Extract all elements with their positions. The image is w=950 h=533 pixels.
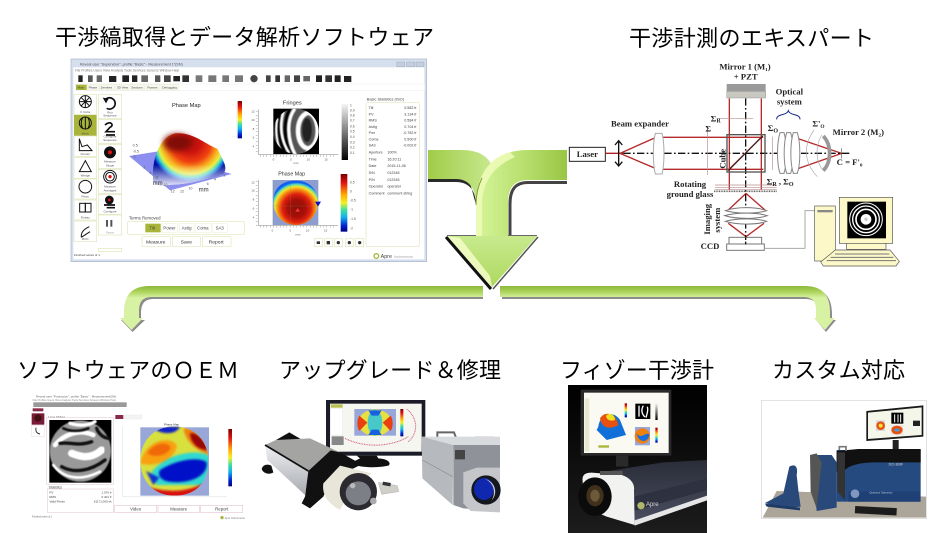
chart: fringes: 10: [251, 118, 255, 122]
chart: phase map top view: -1: [350, 208, 353, 212]
chart: fringes: 4: [253, 144, 255, 148]
brace: [777, 111, 800, 119]
photo: OEM software screenshot: Statistics: [49, 485, 62, 489]
photo: upgrade hardware: [262, 400, 501, 512]
chart: 3D phase map: 12: [171, 190, 175, 194]
chart: 3D phase map: -1: [133, 154, 136, 158]
panel: basic statistics: 012345: [387, 178, 400, 182]
screenshot: analysis software window: Finished series of 1: [74, 253, 100, 257]
side panel: second tool column: Sequence: [103, 138, 117, 142]
panel: basic statistics: Tilt: [369, 106, 373, 110]
chart: 3D phase map: 10: [188, 186, 192, 190]
panel: basic statistics: 2015-11-06: [387, 164, 406, 168]
diagram labels: Σ': [812, 119, 820, 129]
photo: OEM software screenshot: Measure: [170, 507, 188, 512]
panel: basic statistics: -0.002 fr: [403, 144, 417, 148]
chart: fringes: 0.7: [350, 119, 355, 123]
photo: OEM software screenshot: Phase Map: [164, 422, 179, 426]
panel: basic statistics: RMS: [369, 119, 377, 123]
chart: 3D phase map: 6: [207, 182, 209, 186]
beam paths: [620, 98, 842, 237]
photo: Fizeau interferometer: [568, 385, 707, 533]
laser box: [569, 147, 605, 161]
diagram labels: Rotating: [674, 179, 707, 189]
heading: software OEM: ソフトウェアのＯＥＭ: [17, 358, 239, 383]
photo: OEM software screenshot: RMS: [49, 495, 56, 499]
chart: phase map top view: 0: [272, 229, 274, 233]
panel: basic statistics: Pwr: [369, 131, 376, 135]
chart: fringes: mm: [293, 161, 299, 165]
title: interferometry expert: 干渉計測のエキスパート: [629, 26, 874, 51]
side panel: second tool column: Single: [106, 163, 114, 167]
diagram labels: CCD: [701, 241, 719, 251]
panel: basic statistics: Basic Statistics (ISO): [367, 96, 405, 101]
diagram labels: system: [777, 97, 803, 107]
chart: fringes: 0.1: [350, 151, 355, 155]
side panel: left tool column: Fizeau: [81, 216, 90, 220]
main instrument: Quantum Optronics: [869, 490, 893, 494]
title: fringe acquisition and analysis software: 干渉縞取得とデータ解析ソフトウェア: [55, 25, 434, 50]
chart: 3D phase map: mm: [153, 181, 163, 187]
chart: fringes: 5: [290, 158, 292, 162]
chart: phase map top view: 10: [251, 188, 255, 192]
monitor: [326, 400, 425, 467]
chart: phase map top view: -1.5: [350, 217, 356, 221]
controls: terms removed and action buttons: Terms Removed: [129, 215, 161, 220]
side panel: second tool column: Averaged: [104, 188, 117, 192]
side panel: second tool column: Measure: [104, 160, 116, 164]
chart: fringes: 15: [324, 158, 328, 162]
controls: terms removed and action buttons: Measure: [146, 240, 166, 246]
panel: basic statistics: [366, 96, 419, 247]
chart: fringes: Fringes: [283, 101, 302, 107]
photo: OEM software screenshot: File Profiles Users View Analysis Tools Services Screens Window Help: [33, 398, 116, 402]
side panel: second tool column: [98, 94, 122, 251]
photo: OEM software screenshot: 1.076 fr: [102, 490, 112, 494]
chart: phase map top view: 12: [251, 180, 255, 184]
logo: Apre Instruments: [374, 254, 413, 260]
logo: Apre Instruments: Instruments: [394, 255, 413, 259]
photo: OEM software screenshot: Apre Instruments: [225, 516, 246, 520]
diagram labels: Σ: [768, 123, 773, 133]
diagram labels: ground glass: [667, 189, 714, 199]
side panel: second tool column: Pause: [106, 231, 115, 235]
panel: basic statistics: 0.704 fr: [404, 125, 417, 129]
chart: fringes: 0.4: [350, 135, 355, 139]
panel: basic statistics: 16:20:11: [387, 157, 401, 161]
panel: basic statistics: Operator: [369, 185, 384, 189]
diagram labels: Optical: [776, 87, 804, 97]
panel: basic statistics: P/N: [369, 178, 375, 182]
blue fixtures: [765, 453, 897, 515]
photo: OEM software screenshot: Valid Points: [49, 499, 65, 503]
chart: fringes: 0.5: [350, 130, 355, 134]
optical table: [763, 491, 926, 518]
diagram labels: , Σ: [777, 177, 789, 187]
main instrument: DCI-300F: [889, 463, 903, 467]
screenshot: analysis software window: [71, 59, 427, 262]
panel: basic statistics: Date: [369, 164, 376, 168]
chart: fringes: 6: [253, 136, 255, 140]
diagram labels: R: [772, 182, 777, 188]
toolbar icons: [78, 75, 351, 82]
diagram labels: Cube: [718, 149, 728, 169]
photo: custom system: [761, 400, 927, 519]
panel: basic statistics: 100%: [387, 150, 397, 154]
side panel: second tool column: Sequence: [103, 114, 117, 118]
panel: basic statistics: AstIg: [369, 125, 377, 129]
diagram labels: Mirror 1 (M₁): [719, 61, 771, 71]
controls: terms removed and action buttons: Coma: [197, 226, 209, 231]
centre lines: [623, 98, 850, 245]
CCD: [727, 237, 764, 250]
chart: fringes: 1: [350, 104, 352, 108]
diagram labels: Σ: [767, 177, 772, 187]
chart: phase map top view: 5: [289, 229, 291, 233]
panel: basic statistics: S/N: [369, 171, 375, 175]
side panel: left tool column: Wedge: [81, 174, 90, 178]
side panel: second tool column: Configure: [104, 135, 117, 139]
tab bar: Debugging: [162, 86, 177, 90]
chart: 3D phase map: 2: [223, 174, 225, 178]
panel: basic statistics: 0.584 fr: [404, 119, 417, 123]
beam splitter cube: [727, 135, 765, 172]
chart: phase map top view: 0: [350, 189, 352, 193]
photo: OEM software screenshot: 51171.000 ok: [94, 499, 112, 503]
chart: phase map top view: 4: [253, 216, 255, 220]
chart: phase map top view: Phase Map: [278, 172, 305, 178]
heading: custom support: カスタム対応: [772, 358, 905, 383]
arrow: merging main green arrow: [428, 150, 567, 289]
diagram labels: O: [789, 182, 794, 188]
instrument: [578, 460, 707, 526]
chart: fringes: 12: [251, 109, 255, 113]
panel: basic statistics: comment string: [387, 192, 412, 196]
chart: phase map top view: 8: [253, 198, 255, 202]
chart: fringes: 0.8: [350, 114, 355, 118]
diagram labels: Mirror 2 (M₂): [833, 127, 884, 137]
chart: 3D phase map: Phase Map: [172, 103, 201, 109]
tab bar: Zernikes: [101, 86, 113, 90]
chart: fringes: 8: [253, 127, 255, 131]
chart: 3D phase map: 0.5: [133, 144, 138, 148]
chart: fringes: 0.2: [350, 146, 355, 150]
controls: terms removed and action buttons: Report: [209, 240, 224, 246]
rotating ground glass: [714, 189, 777, 194]
photo: OEM software screenshot: 0.401 fr: [102, 495, 112, 499]
arrow: branch to the right: [500, 286, 836, 332]
controls: terms removed and action buttons: Power: [163, 226, 176, 231]
chart: phase map top view: 15: [324, 229, 328, 233]
controls: terms removed and action buttons: [128, 215, 364, 247]
second camera: [422, 432, 501, 512]
chart: fringes: 0: [273, 158, 275, 162]
chart: 3D phase map: mm: [199, 187, 209, 193]
monitor: [866, 405, 923, 450]
diagram labels: C = F'₀: [837, 157, 863, 167]
chart: 3D phase map: 12: [180, 190, 184, 194]
tab bar: 3D View: [117, 86, 129, 90]
side panel: second tool column: Measure: [104, 185, 116, 189]
chart: phase map top view: mm: [295, 232, 301, 236]
reference lines: [707, 118, 777, 189]
heading: Fizeau interferometer: フィゾー干渉計: [560, 358, 714, 383]
photo: OEM software screenshot: Reveal user "Production", profile "Basic" - Measurement(SN): [36, 394, 116, 398]
main instrument: [837, 447, 921, 502]
panel: basic statistics: Time: [369, 157, 377, 161]
chart: phase map top view: 10: [306, 229, 310, 233]
photo: OEM software screenshot: Video: [130, 507, 142, 512]
arrow: branch to the left: [120, 286, 483, 332]
controls: terms removed and action buttons: SA3: [216, 226, 224, 231]
beam expander lens: [653, 133, 664, 174]
heading: upgrade and repair: アップグレード＆修理: [279, 358, 501, 383]
panel: basic statistics: 012345: [387, 171, 400, 175]
panel: basic statistics: 3.134 fr: [404, 112, 417, 116]
chart: fringes: 0.3: [350, 140, 355, 144]
mirror 1: [727, 84, 766, 98]
panel: basic statistics: Comment: [369, 192, 385, 196]
diagram labels: O: [773, 128, 778, 134]
tab bar: Frames: [147, 86, 158, 90]
monitor: [581, 390, 671, 467]
tab bar: Main: [78, 86, 84, 90]
diagram labels: O: [820, 124, 825, 130]
mirror 2 and wavefronts: [806, 130, 842, 177]
panel: basic statistics: Coma: [369, 137, 379, 141]
tab bar: [75, 84, 425, 91]
controls: terms removed and action buttons: Tilt: [149, 226, 156, 231]
panel: basic statistics: 0.582 fr: [404, 106, 417, 110]
chart: 3D phase map: 6: [156, 175, 158, 179]
optical system lenses: [777, 133, 800, 173]
chart: phase map top view: -0.5: [350, 199, 356, 203]
diagram: interferometer optical layout: [569, 61, 899, 266]
chart: 3D phase map: 4: [149, 171, 151, 175]
imaging lenses: [725, 208, 767, 224]
chart: phase map top view: -2: [350, 226, 353, 230]
screenshot: analysis software window: File Profiles Users View Analysis Tools Services Screens Window Help: [75, 68, 179, 72]
diagram labels: R: [716, 119, 721, 125]
chart: fringes: 0.6: [350, 124, 355, 128]
panel: basic statistics: operator: [387, 185, 402, 189]
chart: 3D phase map: 2: [143, 165, 145, 169]
computer with fringe display: [764, 197, 899, 266]
chart: 3D phase map: 10: [163, 183, 167, 187]
panel: basic statistics: -0.782 fr: [403, 131, 417, 135]
tab bar: Sections: [131, 86, 143, 90]
diagram labels: + PZT: [734, 71, 758, 81]
panel: basic statistics: 0.500 fr: [404, 137, 417, 141]
panel: basic statistics: SA3: [369, 144, 376, 148]
chart: phase map top view: [251, 172, 356, 236]
chart: phase map top view: 6: [253, 206, 255, 210]
side panel: second tool column: Run: [107, 110, 113, 114]
diagram labels: Σ: [705, 123, 711, 133]
chart: 3D phase map: -0.5: [133, 150, 139, 154]
diagram labels: system: [712, 207, 722, 233]
diagram labels: Σ: [711, 113, 716, 123]
side panel: left tool column: C Cube: [80, 110, 91, 114]
laser box: Laser: [577, 149, 598, 159]
side panel: left tool column: Basic: [82, 131, 89, 135]
screenshot: analysis software window: Reveal user "Supervisor", profile "Basic" - Measurement 1*(SN): [80, 63, 183, 67]
photo: OEM software screenshot: Finished series of 1: [32, 516, 53, 519]
chart: fringes: 10: [307, 158, 310, 162]
photo: OEM software screenshot: [31, 393, 247, 522]
chart: fringes: [251, 101, 355, 165]
side panel: left tool column: [74, 94, 97, 242]
photo: OEM software screenshot: Live Video: [48, 415, 65, 419]
chart: fringes: 0.9: [350, 109, 355, 113]
chart: phase map top view: 0.5: [350, 180, 355, 184]
diagram labels: [611, 61, 884, 251]
photo: OEM software screenshot: Report: [215, 507, 229, 512]
controls: terms removed and action buttons: Save: [181, 240, 192, 246]
tab bar: Phase: [89, 86, 97, 90]
chart: 3D phase map: [129, 101, 242, 194]
side panel: second tool column: Configure: [104, 210, 117, 214]
panel: basic statistics: PV: [369, 112, 374, 116]
controls: terms removed and action buttons: AstIg: [182, 226, 192, 231]
diagram labels: Imaging: [702, 203, 712, 235]
side panel: left tool column: Fourier: [81, 152, 90, 156]
side panel: left tool column: ROC: [82, 237, 89, 241]
side panel: left tool column: Prism: [82, 195, 90, 199]
panel: basic statistics: Aperture: [369, 150, 383, 154]
logo: Apre Instruments: Apre: [381, 254, 392, 260]
chart: 3D phase map: 4: [214, 178, 216, 182]
instrument: Apre: [646, 502, 659, 508]
photo: OEM software screenshot: PV: [49, 490, 53, 494]
camera body: [262, 432, 399, 510]
expander double arrow: [615, 141, 622, 166]
diagram labels: Beam expander: [611, 118, 669, 128]
